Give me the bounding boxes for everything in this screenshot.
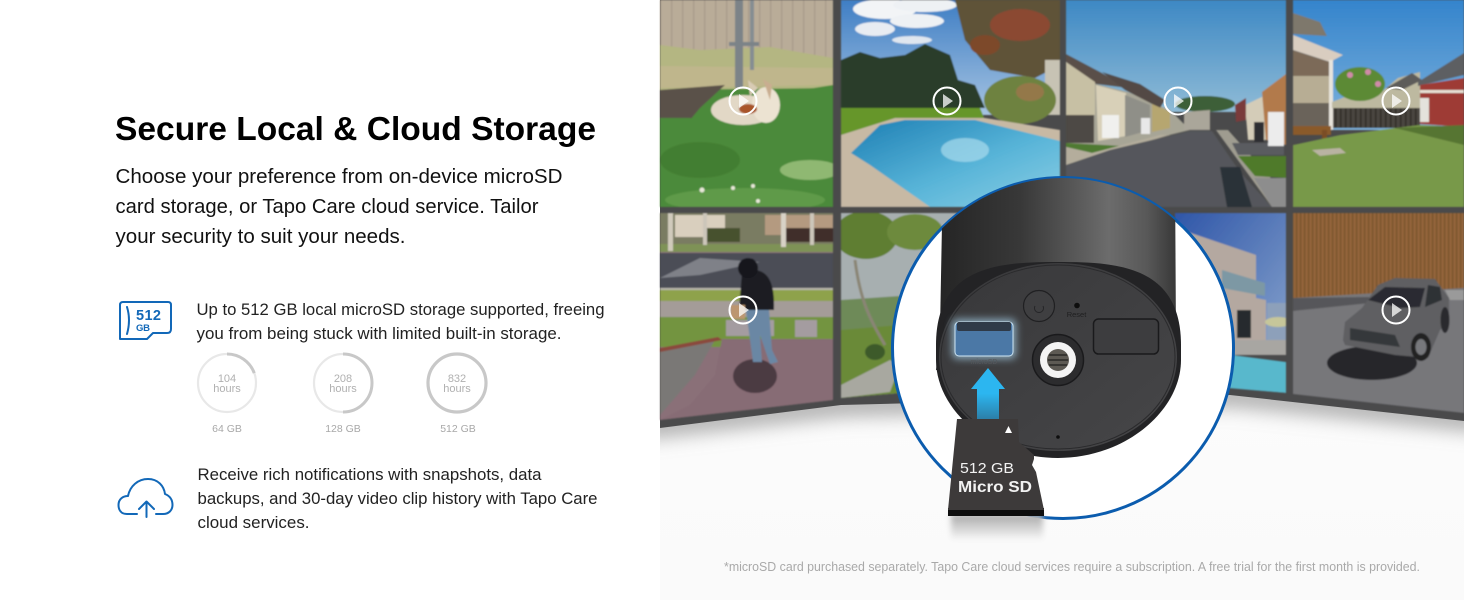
microSD slot [955, 322, 1013, 366]
microSD card: 512 GB [960, 460, 1014, 477]
video wall frame [660, 0, 1464, 428]
photo: house and lawn [1293, 0, 1464, 207]
chart: 512 GB 832 hours ring: 512 GB [440, 423, 476, 435]
bottom hole [1056, 435, 1060, 439]
intro paragraph [116, 165, 562, 248]
chart: 512 GB 832 hours ring [428, 354, 486, 435]
photo: car in driveway [1293, 213, 1464, 415]
photo: garden with trees [840, 212, 958, 399]
chart: 128 GB 208 hours ring [314, 354, 372, 435]
icon: 512 GB microSD card: 512 [136, 308, 161, 324]
photo: person with package on walkway [660, 213, 833, 423]
text: cloud services: Receive rich notifications with snapshots, data [198, 466, 542, 484]
camera underside [936, 170, 1181, 458]
camera base face [936, 262, 1181, 458]
chart: 128 GB 208 hours ring: 128 GB [325, 423, 361, 435]
icon: 512 GB microSD card: GB [136, 323, 150, 334]
microSD card [948, 419, 1044, 516]
text: microSD storage [196, 301, 604, 343]
photo: swimming pool [841, 0, 1060, 207]
card shadow [951, 514, 1043, 540]
intro paragraph: your security to suit your needs. [116, 225, 406, 248]
chart: 128 GB 208 hours ring: hours [329, 383, 357, 395]
text: cloud services [198, 466, 598, 532]
microSD slot glow [952, 319, 1016, 359]
intro paragraph: card storage, or Tapo Care cloud service. Tailor [116, 195, 539, 218]
chart: 512 GB 832 hours ring: 832 [448, 373, 466, 385]
tripod mount [1032, 334, 1084, 386]
callout: magnified camera circle [892, 178, 1234, 518]
text: cloud services: backups, and 30-day video clip history with Tapo Care [198, 490, 598, 508]
icon: cloud upload [118, 479, 172, 517]
rear cover [1094, 319, 1158, 354]
power button [1024, 290, 1054, 322]
photo: dog on grass [660, 0, 840, 212]
icon: 512 GB microSD card [120, 302, 171, 339]
wall shadow [640, 395, 1464, 428]
chart: 128 GB 208 hours ring: 208 [334, 373, 352, 385]
chart: 64 GB 104 hours ring: hours [213, 383, 241, 395]
reset hole and label: Reset [1067, 310, 1087, 319]
camera body [936, 170, 1176, 370]
panel: right background [660, 0, 1464, 600]
intro paragraph: Choose your preference from on-device microSD [116, 165, 562, 188]
chart: 64 GB 104 hours ring: 64 GB [212, 423, 242, 435]
reset hole and label [1067, 302, 1086, 317]
video wall photos [660, 0, 1464, 423]
play buttons [730, 88, 1410, 324]
footnote: *microSD card purchased separately. Tapo Care cloud services require a subscription. A free trial for the first month is provided. [724, 560, 1420, 574]
chart: 64 GB 104 hours ring [198, 354, 256, 435]
photo: residential street [1066, 0, 1286, 207]
text: cloud services: cloud services. [198, 514, 310, 532]
microSD card: Micro SD [958, 479, 1032, 496]
arrow: insert card [971, 368, 1005, 419]
microSD slot: microSD [971, 359, 997, 366]
chart: 512 GB 832 hours ring: hours [443, 383, 471, 395]
photo: modern building with pool [1175, 213, 1291, 393]
text: microSD storage: you from being stuck with limited built-in storage. [196, 325, 562, 343]
title: Secure Local & Cloud Storage [115, 111, 596, 148]
panel: text column background [0, 0, 660, 600]
chart: 64 GB 104 hours ring: 104 [218, 373, 236, 385]
text: microSD storage: Up to 512 GB local microSD storage supported, freeing [196, 301, 604, 319]
